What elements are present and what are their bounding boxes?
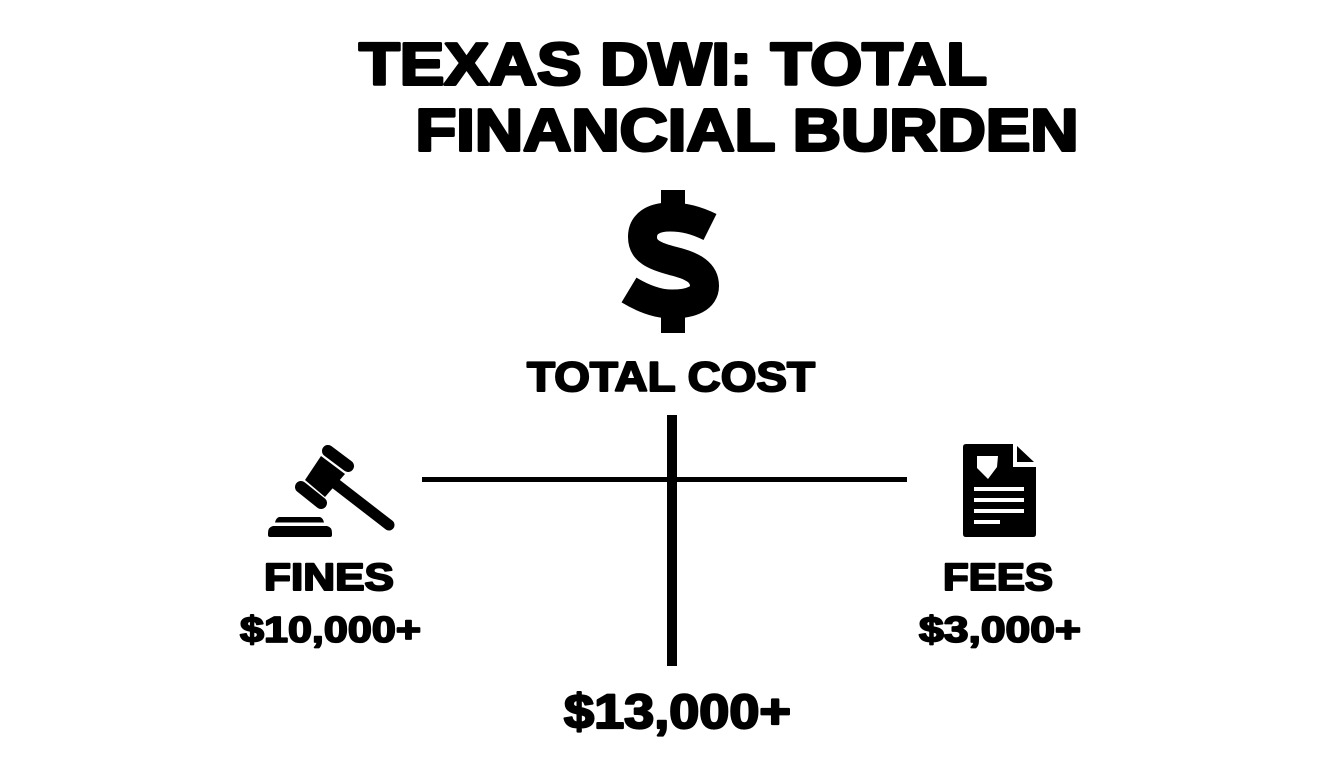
label: fees: FEES: [943, 557, 1053, 599]
connector: horizontal line: [422, 477, 907, 482]
value: total amount: $13,000+: [564, 686, 791, 739]
icon: dollar sign: [629, 190, 710, 333]
icon: gavel: [268, 451, 389, 537]
connector: vertical line: [667, 415, 677, 666]
value: fines amount: $10,000+: [240, 609, 421, 650]
value: fees amount: $3,000+: [919, 609, 1081, 650]
title: [359, 32, 1078, 164]
heading: total cost: TOTAL COST: [527, 353, 815, 400]
title: FINANCIAL BURDEN: [416, 98, 1078, 164]
title: TEXAS DWI: TOTAL: [359, 32, 987, 98]
icon: legal document: [963, 444, 1036, 537]
label: fines: FINES: [264, 557, 394, 599]
